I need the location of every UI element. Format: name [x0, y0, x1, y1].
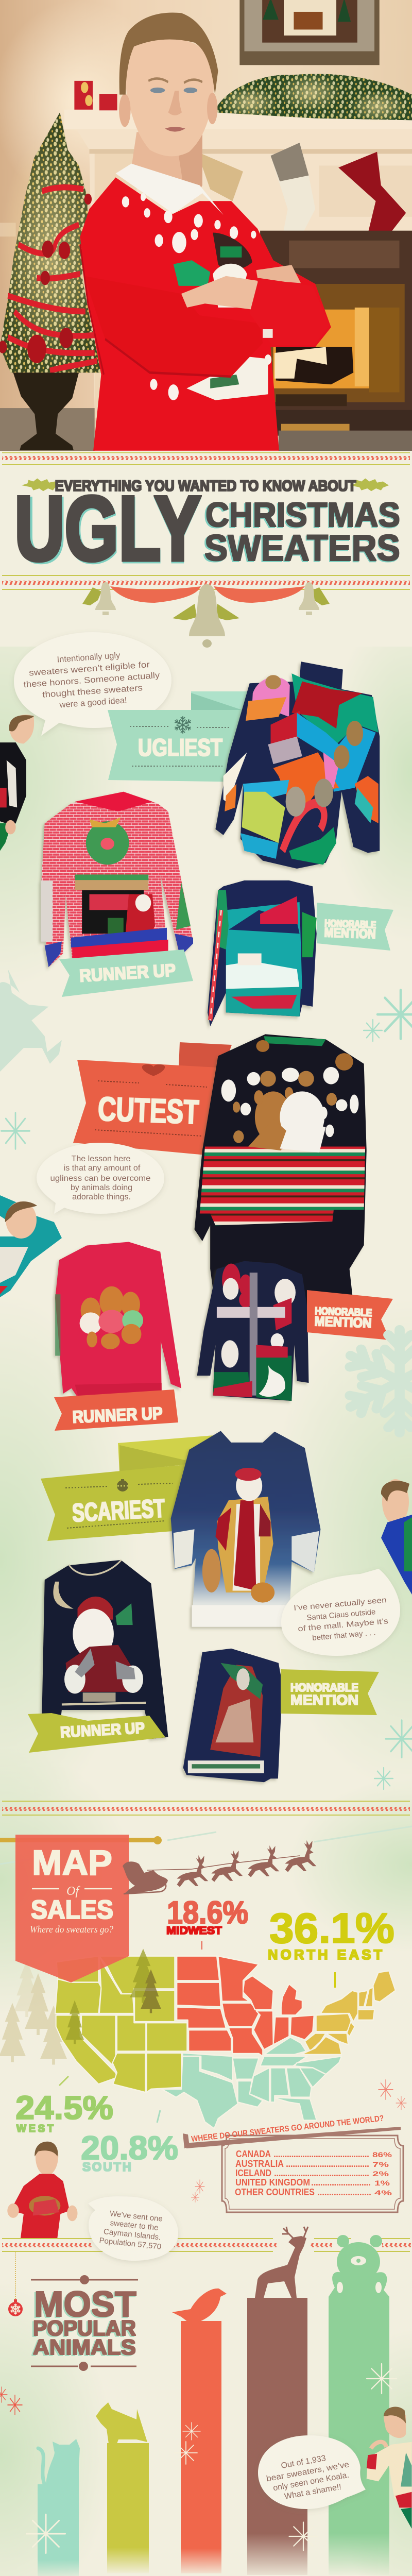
stat: south [81, 2110, 178, 2174]
sweater: winter sleigh honorable [208, 880, 317, 1026]
sweater: red beary merry christmas [55, 1242, 181, 1399]
title: UGLY: UGLY [17, 479, 200, 581]
bar: bears [329, 2235, 389, 2575]
bar: reindeer [247, 2227, 308, 2575]
ribbon: honorable mention olive [281, 1669, 379, 1715]
ribbon: scariest [41, 1464, 191, 1541]
heading: sales: SALES [31, 1895, 113, 1924]
speech bubble: cayman islands: We’ve sent one [109, 2209, 163, 2224]
eyes, nose, brows and mouth [148, 78, 202, 132]
label: honorable mention red: MENTION [314, 1313, 372, 1331]
man [80, 12, 331, 451]
title: UGLY: UGLY [14, 477, 201, 580]
stat: midwest: MIDWEST [166, 1925, 222, 1937]
stat: north east: NORTH EAST [268, 1947, 382, 1962]
picture frame [239, 0, 380, 65]
heading: most: MOST [32, 2285, 135, 2325]
table rows: CANADA [236, 2149, 271, 2159]
stat: west: WEST [16, 2123, 54, 2134]
label: honorable mention olive: HONORABLE [290, 1681, 358, 1694]
tree urn [13, 372, 79, 450]
neck [131, 132, 202, 199]
speech bubble: santa claus: of the mall. Maybe it’s [298, 1617, 389, 1633]
section: scariest [28, 1431, 412, 1789]
trees on the map [65, 1948, 161, 2044]
speech bubble: koala: Out of 1,933 [280, 2454, 327, 2470]
label: scariest: SCARIEST [72, 1494, 165, 1528]
heading: popular: POPULAR [31, 2317, 134, 2341]
table rows: 2% [372, 2170, 389, 2178]
ribbon dotted lines [130, 726, 230, 766]
stockings [197, 143, 406, 248]
bar: dogs [96, 2402, 149, 2573]
title: SWEATERS: SWEATERS [203, 529, 400, 570]
centre bell [189, 584, 225, 636]
table rows: 4% [374, 2189, 392, 2197]
table rows: ........................................... [274, 2168, 369, 2178]
bar chart of animals [0, 2227, 397, 2576]
stat: north east: 36.1% [269, 1904, 394, 1952]
folded arms [80, 244, 330, 377]
stat: south: 20.8% [81, 2129, 178, 2166]
panel: red banner [15, 1835, 129, 1982]
speech bubble: intentionally ugly: Intentionally ugly [57, 651, 121, 665]
man with teal cat sweater, arms up [0, 1195, 62, 1297]
rope divider: map [2, 1801, 410, 1816]
table rows: 86% [372, 2150, 392, 2159]
table heading: WHERE DO OUR SWEATERS GO AROUND THE WORLD? [191, 2114, 384, 2144]
table: where sweaters go [183, 2114, 403, 2212]
star decoration [386, 1720, 412, 1757]
ribbon: honorable mention red [307, 1290, 393, 1340]
south region states [162, 2037, 341, 2128]
big snowflake decoration [343, 1330, 412, 1433]
candle glow [0, 0, 165, 205]
speech bubble: intentionally ugly: sweaters weren’t eligible for [29, 660, 150, 677]
speech bubble: intentionally ugly: these honors. Someone actually [23, 671, 161, 689]
label: runner up: RUNNER UP [79, 960, 176, 986]
table rows: OTHER COUNTRIES [235, 2187, 315, 2197]
holly sprigs [82, 587, 330, 620]
santa sleigh [123, 1861, 168, 1894]
speech bubble: lesson: ugliness can be overcome [50, 1174, 151, 1183]
table rows: ICELAND [235, 2168, 271, 2178]
holly left [22, 478, 61, 491]
snowman graphic [174, 233, 268, 400]
table rows: ........................................... [273, 2149, 369, 2159]
star decoration small [374, 1768, 393, 1789]
ribbon fold [191, 691, 252, 710]
bar: birds [172, 2289, 227, 2573]
ribbon swags [110, 586, 305, 603]
label: honorable mention mint: MENTION [324, 925, 376, 942]
man with black reindeer sweater [0, 715, 34, 851]
speech bubble: intentionally ugly [14, 632, 171, 736]
heading: most: MOST [34, 2284, 136, 2324]
background trees [0, 1960, 67, 2065]
red stars [0, 2387, 22, 2415]
snow stars on bars [27, 2364, 397, 2553]
holly right [350, 478, 389, 491]
star decoration small right [364, 1020, 382, 1041]
man with blue tree sweater [381, 1479, 412, 1595]
ribbon fold [118, 1435, 214, 1471]
label: honorable mention red: HONORABLE [315, 1306, 372, 1319]
speech bubble: lesson [37, 1143, 164, 1214]
reindeer team [177, 1840, 316, 1887]
left bell [95, 582, 116, 615]
section: most popular animals [0, 2227, 411, 2576]
table ribbon [183, 2127, 401, 2148]
pale streaks [0, 1826, 412, 1864]
rope divider bottom [2, 575, 410, 590]
label: honorable mention red [314, 1306, 372, 1331]
speech bubble: lesson: The lesson here [72, 1155, 130, 1163]
section: map of sales [0, 1826, 412, 2261]
ribbon: runner up red [54, 1389, 178, 1431]
face [124, 39, 214, 156]
west region states [55, 1956, 187, 2092]
label: ugliest: UGLIEST [138, 734, 222, 761]
speech bubble: santa claus: I’ve never actually seen [294, 1596, 387, 1613]
table rows: 7% [372, 2160, 389, 2168]
stat: west [15, 2076, 113, 2134]
speech bubble: intentionally ugly: thought these sweaters [42, 683, 143, 700]
christmas tree [0, 112, 101, 372]
speech bubble: intentionally ugly: were a good idea! [59, 696, 127, 710]
title: SWEATERS: SWEATERS [204, 528, 400, 569]
table rows: UNITED KINGDOM [235, 2177, 310, 2188]
sweater: old world santa [171, 1431, 320, 1627]
pink stars [192, 2080, 406, 2202]
sweater: santa crescent moon runner up [42, 1560, 168, 1739]
section: ugliest [0, 632, 393, 1026]
ribbon: runner up [59, 950, 193, 997]
speech bubble: lesson: is that any amount of [64, 1164, 141, 1173]
fireplace [260, 231, 412, 451]
table rows: AUSTRALIA [235, 2159, 284, 2169]
title: CHRISTMAS: CHRISTMAS [205, 496, 400, 534]
speech bubble: lesson: adorable things. [72, 1193, 131, 1201]
floor [0, 408, 95, 451]
star decoration large right [377, 990, 412, 1039]
heading bottom ornament [31, 2362, 136, 2371]
table rows: 1% [374, 2179, 390, 2187]
ribbon fold [179, 1042, 232, 1067]
label: honorable mention olive: MENTION [290, 1692, 358, 1708]
gold bar [0, 1836, 162, 1844]
sweater: brick fireplace runner up [41, 792, 193, 967]
reins [147, 1856, 300, 1870]
bar: cats [38, 2439, 80, 2576]
midwest region states [177, 1956, 314, 2056]
speech bubble: cayman islands: Population 57,570 [99, 2236, 162, 2251]
ribbon: cutest [73, 1060, 227, 1156]
speech bubble: koala: bear sweaters, we’ve [266, 2460, 350, 2483]
stat: midwest: 18.6% [167, 1895, 248, 1930]
wall [0, 0, 412, 451]
right bell [299, 582, 319, 615]
ribbon dotted lines [65, 1483, 173, 1528]
ribbon: runner up olive [28, 1713, 165, 1753]
speech bubble: santa claus: Santa Claus outside [306, 1607, 376, 1622]
title band [0, 451, 412, 647]
table rows: ..................................... [286, 2159, 369, 2169]
speech bubble: santa claus [281, 1569, 400, 1656]
candles [74, 81, 117, 110]
icon: snowflake [174, 717, 192, 733]
garland with lights [214, 73, 412, 122]
heading top ornament [31, 2275, 138, 2284]
label: runner up red: RUNNER UP [72, 1403, 163, 1427]
man with thumbs up [7, 2142, 78, 2239]
stat: midwest [166, 1895, 248, 1950]
stat: south: SOUTH [82, 2160, 131, 2174]
subtitle: EVERYTHING YOU WANTED TO KNOW ABOUT [55, 478, 356, 495]
sweater: patchwork ugliest [215, 662, 380, 869]
sweater: bears hearts [195, 1034, 367, 1308]
speech bubble: koala [258, 2435, 366, 2509]
sweater body [80, 177, 331, 451]
north east region states [301, 1971, 396, 2055]
mantel [0, 110, 412, 418]
table rows: .......................... [311, 2177, 371, 2188]
speech bubble: cayman islands [88, 2196, 178, 2261]
chest snowflakes [122, 193, 271, 400]
collar [115, 164, 224, 215]
heading: animals: ANIMALS [31, 2336, 134, 2360]
ornament [8, 2252, 23, 2316]
ribbon: ugliest [108, 710, 252, 782]
heading: map: MAP [32, 1843, 112, 1883]
icon: ornament [117, 1479, 128, 1492]
stat: north east [268, 1904, 394, 1988]
neck shadow [179, 132, 202, 199]
table rows: ....................... [317, 2187, 371, 2197]
sweater: cats checker [197, 1261, 308, 1401]
label: honorable mention mint [324, 918, 376, 942]
hero photo: man in red sweater by fireplace [0, 0, 412, 451]
rope divider top [2, 452, 410, 465]
speech bubble: lesson: by animals doing [71, 1183, 132, 1192]
speech bubble: koala: only seen one Koala. [272, 2471, 350, 2493]
sweater: father christmas honorable [183, 1649, 282, 1782]
speech bubble: cayman islands: Cayman Islands. [103, 2227, 161, 2242]
icon: heart [142, 1064, 165, 1076]
speech bubble: santa claus: better that way . . . [312, 1628, 376, 1642]
ribbon: honorable mention mint [317, 903, 393, 951]
table rows [235, 2149, 392, 2197]
ribbon dotted lines [95, 1081, 207, 1136]
speech bubble: koala: What a shame!! [284, 2483, 342, 2501]
table frame [222, 2136, 403, 2212]
label: cutest: CUTEST [97, 1090, 199, 1131]
subheading: Where do sweaters go? [30, 1924, 113, 1935]
heading: animals: ANIMALS [33, 2335, 136, 2359]
map of the United States [55, 1956, 396, 2128]
star decoration left [1, 1113, 29, 1149]
label: honorable mention mint: HONORABLE [324, 918, 376, 931]
ears [119, 93, 217, 127]
label: runner up olive: RUNNER UP [60, 1720, 145, 1741]
man in cream sweater [367, 2406, 411, 2529]
hair [119, 12, 218, 95]
background reindeer [0, 969, 62, 1072]
bells and ribbon [82, 582, 330, 648]
title: CHRISTMAS: CHRISTMAS [204, 497, 400, 535]
heading: popular: POPULAR [33, 2316, 136, 2340]
speech bubble: cayman islands: sweater to the [110, 2218, 159, 2232]
rope divider: animals [2, 2239, 411, 2251]
label: honorable mention olive [290, 1681, 358, 1708]
section: cutest [0, 1034, 412, 1433]
stat: west: 24.5% [15, 2089, 113, 2126]
heading rule and OF: Of [66, 1885, 80, 1898]
